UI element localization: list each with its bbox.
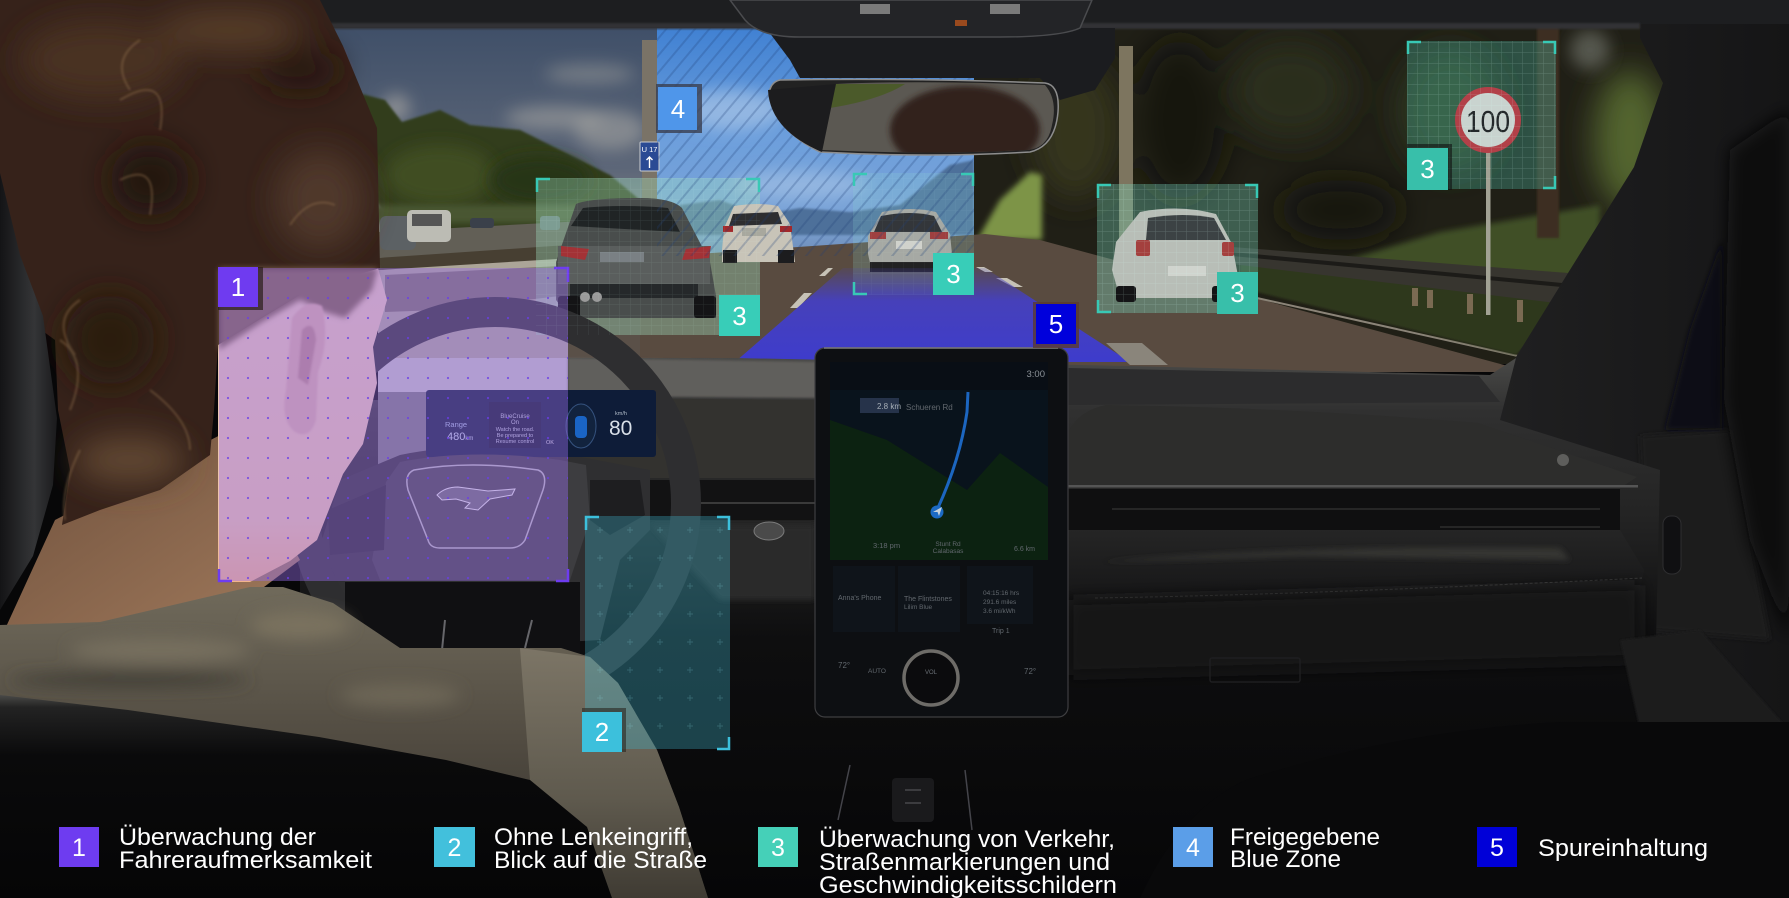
legend item 2 bbox=[434, 824, 707, 874]
badge 3: 3 bbox=[1420, 154, 1435, 184]
sky left bbox=[300, 24, 662, 264]
overlay fill bbox=[219, 268, 568, 581]
mustang emblem bbox=[437, 487, 515, 510]
silver car bbox=[868, 209, 952, 272]
cluster display: On bbox=[511, 420, 519, 426]
tree trunk bbox=[1537, 26, 1559, 238]
right vent bbox=[1068, 489, 1620, 530]
panel 1: driver attention monitoring overlay bbox=[218, 267, 568, 581]
screen texts: 72° bbox=[838, 661, 850, 670]
badge 5: lane keeping bbox=[1033, 302, 1079, 348]
speed limit sign bbox=[1458, 90, 1518, 315]
cluster display: 480km bbox=[447, 431, 473, 443]
face skin bbox=[218, 268, 387, 582]
blue zone hatch bbox=[657, 24, 974, 256]
legend item 2: Blick auf die Straße bbox=[494, 847, 707, 874]
screen texts: AUTO bbox=[868, 668, 886, 675]
panel 2: hands-free overlay bbox=[582, 516, 730, 752]
badge 2: 2 bbox=[595, 717, 609, 747]
legend item 1: Überwachung der bbox=[119, 824, 316, 851]
legend item 5: 5 bbox=[1490, 834, 1504, 862]
screen texts: 3.6 mi/kWh bbox=[983, 608, 1016, 615]
top bar bbox=[830, 362, 1048, 390]
guardrail bbox=[1232, 247, 1568, 322]
wheel badge plate bbox=[407, 465, 545, 548]
screen texts: 6.6 km bbox=[1014, 546, 1035, 553]
legend item 3: Straßenmarkierungen und bbox=[819, 849, 1110, 876]
motorway sign U17 bbox=[640, 142, 659, 171]
white car bbox=[722, 204, 795, 263]
badge 1 bbox=[218, 267, 263, 310]
screen texts: 3:18 pm bbox=[873, 541, 900, 550]
shirt bbox=[0, 587, 708, 898]
right-hand trees bbox=[974, 24, 1694, 364]
dashboard bbox=[300, 358, 1660, 898]
road marking bottom right bbox=[1106, 343, 1168, 365]
cluster display: Be prepared to bbox=[497, 433, 533, 439]
badge 3: 3 bbox=[946, 259, 961, 289]
trees left bbox=[362, 94, 645, 232]
right speaker grille bbox=[1068, 405, 1637, 486]
grey car bbox=[556, 198, 716, 318]
panel 3b: traffic monitoring, car ahead centre bbox=[853, 173, 974, 295]
position marker bbox=[930, 506, 944, 518]
box tints under the vehicles bbox=[536, 41, 1556, 335]
cluster display: OK bbox=[546, 440, 554, 446]
map bbox=[830, 390, 1048, 560]
left lower trim bbox=[650, 525, 815, 600]
screen texts bbox=[838, 369, 1045, 676]
legend item 1: 1 bbox=[72, 834, 86, 862]
badge 3: 3 bbox=[732, 301, 747, 331]
hair bbox=[0, 0, 380, 525]
badge 5: lane keeping: 5 bbox=[1049, 309, 1063, 339]
A-pillar and right door bbox=[1400, 0, 1789, 898]
badge 3: 3 bbox=[1230, 278, 1245, 308]
hair inside overlay bbox=[219, 268, 378, 350]
motorway sign U17: U 17 bbox=[642, 145, 657, 154]
clouds bbox=[382, 64, 646, 150]
cluster display: Range bbox=[445, 420, 467, 429]
white polo car bbox=[1112, 208, 1238, 302]
screen texts: 04:15:16 hrs bbox=[983, 590, 1020, 597]
right lower dash fade bbox=[1068, 585, 1640, 675]
legend item 5 bbox=[1477, 827, 1708, 867]
left wheel controls bbox=[328, 485, 386, 555]
ring bbox=[304, 312, 686, 694]
shirt folds bbox=[10, 611, 460, 707]
neck bbox=[0, 430, 300, 640]
lane keeping area bbox=[735, 268, 1130, 362]
windshield header bbox=[300, 0, 1789, 28]
route bbox=[937, 392, 968, 510]
poles bbox=[642, 40, 657, 208]
badge 3 bbox=[719, 295, 760, 336]
lower info panels bbox=[833, 566, 1033, 632]
blue zone sky bbox=[657, 24, 974, 256]
legend item 3 bbox=[758, 826, 1117, 898]
panel 3c: traffic monitoring, car right bbox=[1097, 184, 1258, 314]
dash under purple overlay bbox=[378, 358, 568, 470]
horizon trees bbox=[657, 160, 974, 235]
start button bbox=[754, 522, 784, 540]
volume knob bbox=[904, 651, 958, 705]
panel 3d: speed sign recognition bbox=[1407, 41, 1556, 190]
right wheel controls bbox=[590, 480, 645, 535]
bezel bbox=[815, 348, 1068, 717]
screen texts: Lilim Blue bbox=[904, 604, 933, 611]
legend item 4: Freigegebene bbox=[1230, 824, 1380, 851]
cluster display: 80 bbox=[609, 417, 632, 440]
legend item 4: 4 bbox=[1186, 834, 1200, 862]
side window dark bbox=[1665, 240, 1722, 430]
screen texts: 2.8 km bbox=[877, 402, 901, 411]
glovebox handle bbox=[1210, 658, 1300, 682]
hub body bbox=[322, 448, 650, 650]
right dash top bbox=[1068, 368, 1500, 405]
legend item 2: 2 bbox=[448, 834, 461, 862]
dash top highlight bbox=[568, 358, 820, 398]
cluster display: km/h bbox=[615, 411, 627, 417]
legend item 1: Fahreraufmerksamkeit bbox=[119, 847, 372, 874]
panel 3a: traffic monitoring, car ahead left bbox=[536, 178, 760, 336]
map green area bbox=[830, 420, 1048, 560]
legend bbox=[59, 824, 1708, 898]
right door seat panel bbox=[1620, 630, 1789, 730]
sky gap in trees bbox=[1570, 30, 1610, 70]
screen texts: 3:00 bbox=[1026, 369, 1045, 380]
vent trim line bbox=[1068, 485, 1638, 488]
cluster display: Watch the road. bbox=[496, 427, 535, 433]
grass behind guardrail bbox=[1340, 205, 1600, 280]
speed limit sign: 100 bbox=[1466, 104, 1510, 139]
legend item 1 bbox=[59, 824, 372, 874]
mirror mount bbox=[766, 28, 1115, 100]
far left carriageway bbox=[378, 218, 640, 258]
legend item 4: Blue Zone bbox=[1230, 846, 1341, 873]
legend item 4 bbox=[1173, 824, 1380, 873]
cluster display: BlueCruise bbox=[500, 414, 530, 420]
left speaker grille bbox=[568, 398, 815, 478]
volume knob: VOL bbox=[925, 670, 938, 676]
console USB bbox=[838, 765, 972, 830]
shirt arm bbox=[520, 648, 708, 898]
cluster display bbox=[426, 390, 656, 457]
rear-view mirror bbox=[768, 78, 1059, 156]
badge 2 bbox=[582, 708, 626, 752]
wall and verge under purple overlay bbox=[378, 254, 640, 362]
corner brackets bbox=[219, 268, 568, 581]
screen texts: Calabasas bbox=[933, 548, 964, 555]
lane dashes bbox=[790, 267, 1023, 308]
right front seat bbox=[1140, 722, 1789, 898]
screen texts: 291.6 miles bbox=[983, 599, 1017, 606]
door mirror switch bbox=[1663, 516, 1681, 574]
badge 4: blue zone bbox=[656, 84, 702, 133]
screen texts: Trip 1 bbox=[992, 628, 1010, 635]
headrest bbox=[0, 173, 57, 610]
grass verge right bbox=[1240, 262, 1570, 355]
blue zone clouds bbox=[675, 90, 870, 199]
legend item 2: Ohne Lenkeingriff, bbox=[494, 824, 693, 851]
bright green hill bbox=[977, 172, 1042, 240]
right door panel bbox=[1640, 430, 1770, 640]
right lower trim bbox=[1068, 530, 1644, 600]
road scene seen through windshield bbox=[300, 24, 1694, 372]
road verge line bbox=[1257, 298, 1518, 356]
badge 1: 1 bbox=[231, 272, 245, 302]
right-most dark seat edge bbox=[1724, 110, 1789, 640]
left vent bbox=[640, 480, 816, 520]
badge 3 bbox=[1407, 144, 1452, 190]
badge 3 bbox=[1217, 272, 1258, 314]
wheel centre pad bbox=[372, 454, 590, 580]
screen texts: 72° bbox=[1024, 667, 1036, 676]
lower column bbox=[345, 582, 580, 654]
cluster display: Resume control bbox=[496, 439, 534, 445]
driver bbox=[0, 0, 708, 898]
screen texts: Anna's Phone bbox=[838, 595, 881, 602]
badge 4: blue zone: 4 bbox=[671, 94, 685, 124]
screen texts: The Flintstones bbox=[904, 596, 952, 603]
legend item 3: 3 bbox=[771, 834, 785, 862]
legend item 3: Überwachung von Verkehr, bbox=[819, 826, 1115, 853]
screen texts: Stunt Rd bbox=[935, 541, 961, 548]
screen texts: Schueren Rd bbox=[906, 403, 953, 412]
legend item 5: Spureinhaltung bbox=[1538, 835, 1708, 862]
ear bbox=[284, 304, 325, 434]
steering wheel bbox=[304, 312, 686, 694]
driver seat bbox=[0, 695, 612, 898]
speaker dot bbox=[1557, 454, 1569, 466]
central touchscreen bbox=[815, 348, 1068, 717]
road bbox=[640, 234, 1530, 372]
far traffic left bbox=[380, 210, 560, 250]
